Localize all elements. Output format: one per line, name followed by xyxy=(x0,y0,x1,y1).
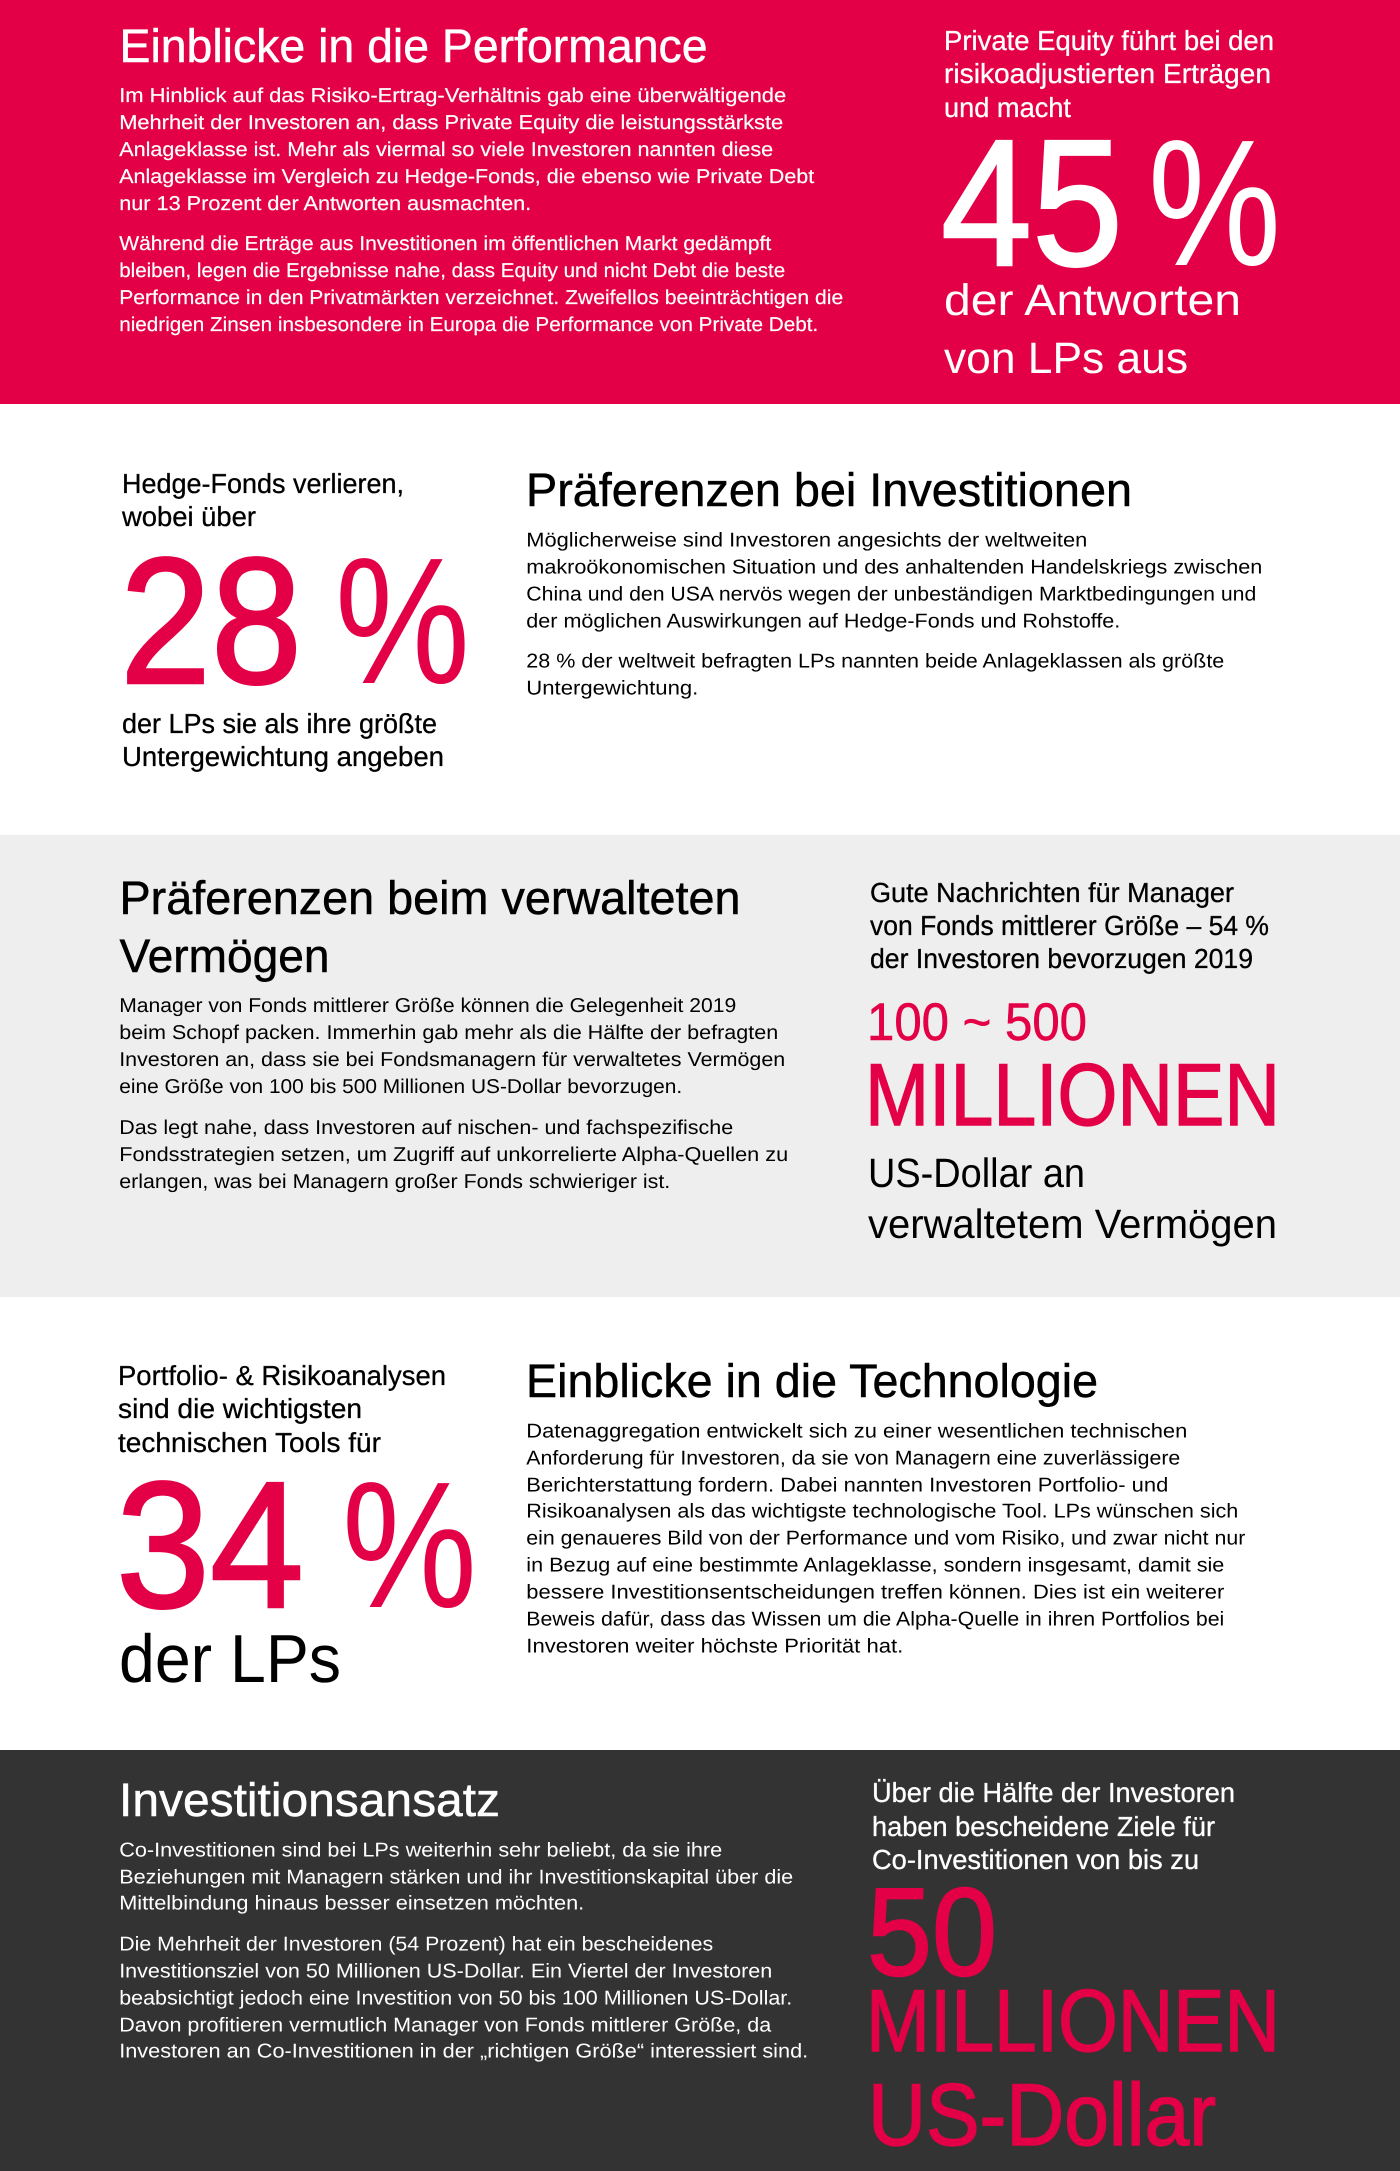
panel: Präferenzen beim verwalteten Vermögen xyxy=(0,835,1400,1297)
callout intro: Private Equity führt bei den xyxy=(944,25,1274,56)
text block: technology: Investoren weiter höchste Priorität hat. xyxy=(526,1636,903,1658)
big number: 50: 50 xyxy=(867,1863,997,2002)
callout outro xyxy=(868,1150,1277,1247)
heading: Präferenzen beim verwalteten Vermögen: Vermögen xyxy=(120,929,330,982)
text block: technology xyxy=(526,1421,1246,1658)
callout outro: verwaltetem Vermögen xyxy=(868,1201,1277,1247)
callout intro: haben bescheidene Ziele für xyxy=(872,1811,1215,1842)
text block: technology: ein genaueres Bild von der Performance und vom Risiko, und zwar nicht nur xyxy=(526,1528,1246,1550)
heading: Präferenzen beim verwalteten Vermögen xyxy=(120,871,740,982)
text block: performance paragraphs: Performance in den Privatmärkten verzeichnet. Zweifellos beeinträchtigen die xyxy=(119,287,843,309)
text block: technology: Beweis dafür, dass das Wissen um die Alpha-Quelle in ihren Portfolios bei xyxy=(526,1609,1224,1631)
callout intro: und macht xyxy=(944,92,1071,123)
panel: Einblicke in die Technologie xyxy=(116,1354,1246,1697)
callout intro xyxy=(944,25,1274,123)
callout: 100 ~ 500 Millionen xyxy=(865,877,1280,1247)
text block: assets under management: eine Größe von 100 bis 500 Millionen US-Dollar bevorzugen. xyxy=(119,1076,682,1098)
callout outro: der Antworten xyxy=(944,276,1241,325)
callout intro: der Investoren bevorzugen 2019 xyxy=(870,943,1253,974)
text block: investment approach: Beziehungen mit Managern stärken und ihr Investitionskapital über die xyxy=(119,1867,793,1889)
text block: assets under management: Fondsstrategien setzen, um Zugriff auf unkorrelierte Alpha-Quellen zu xyxy=(119,1144,788,1166)
callout intro: Hedge-Fonds verlieren, xyxy=(122,468,404,499)
text block: technology: Anforderung für Investoren, da sie von Managern eine zuverlässigere xyxy=(526,1448,1180,1470)
heading: Einblicke in die Performance: Einblicke in die Performance xyxy=(120,19,708,72)
text block: technology: Datenaggregation entwickelt sich zu einer wesentlichen technischen xyxy=(526,1421,1187,1443)
callout intro: Portfolio- & Risikoanalysen xyxy=(118,1360,446,1391)
text block: performance paragraphs: bleiben, legen die Ergebnisse nahe, dass Equity und nicht Debt die beste xyxy=(119,260,785,282)
big number: 45 % xyxy=(941,103,1281,304)
text block: investment preferences: makroökonomischen Situation und des anhaltenden Handelskriegs zwischen xyxy=(526,557,1262,579)
heading: Investitionsansatz: Investitionsansatz xyxy=(119,1773,500,1826)
text block: technology: Risikoanalysen als das wichtigste technologische Tool. LPs wünschen sich xyxy=(526,1501,1238,1523)
big number: 100 ~ 500: 100 ~ 500 xyxy=(867,993,1087,1052)
text block: investment preferences: Möglicherweise sind Investoren angesichts der weltweiten xyxy=(526,530,1087,552)
text block: technology: Berichterstattung fordern. Dabei nannten Investoren Portfolio- und xyxy=(526,1475,1168,1497)
callout intro: Co-Investitionen von bis zu xyxy=(872,1844,1199,1875)
text block: investment approach: beabsichtigt jedoch eine Investition von 50 bis 100 Millionen US-Dollar. xyxy=(119,1988,792,2010)
callout outro: der LPs sie als ihre größte xyxy=(122,708,437,739)
callout intro: wobei über xyxy=(121,501,256,532)
heading: Einblicke in die Technologie: Einblicke in die Technologie xyxy=(526,1354,1098,1407)
text block: assets under management: Manager von Fonds mittlerer Größe können die Gelegenheit 2019 xyxy=(119,995,736,1017)
callout outro: Untergewichtung angeben xyxy=(122,741,444,772)
panel: Investitionsansatz xyxy=(0,1750,1400,2171)
text block: investment approach: Co-Investitionen sind bei LPs weiterhin sehr beliebt, da sie ihre xyxy=(119,1840,722,1862)
callout: 28 % xyxy=(120,468,470,772)
text block: investment approach: Investoren an Co-Investitionen in der „richtigen Größe“ interessiert sind. xyxy=(119,2041,808,2063)
big number: 34 %: 34 xyxy=(116,1445,304,1646)
text block: assets under management: beim Schopf packen. Immerhin gab mehr als die Hälfte der befragten xyxy=(119,1022,778,1044)
big label: MILLIONEN: MILLIONEN xyxy=(865,1045,1280,1144)
callout intro xyxy=(872,1777,1235,1875)
callout intro: sind die wichtigsten xyxy=(118,1393,362,1424)
text block: investment preferences: China und den USA nervös wegen der unbeständigen Marktbedingungen und xyxy=(526,584,1256,606)
text block: assets under management: Das legt nahe, dass Investoren auf nischen- und fachspezifische xyxy=(119,1117,733,1139)
callout outro xyxy=(122,708,444,772)
big number: 34 % xyxy=(116,1445,477,1646)
text block: performance paragraphs xyxy=(119,85,843,336)
text block: investment preferences: der möglichen Auswirkungen auf Hedge-Fonds und Rohstoffe. xyxy=(526,611,1120,633)
callout intro xyxy=(118,1360,446,1458)
text block: performance paragraphs: Im Hinblick auf das Risiko-Ertrag-Verhältnis gab eine überwältigende xyxy=(119,85,786,107)
callout intro xyxy=(870,877,1269,974)
callout: 50 Millionen US-Dollar xyxy=(866,1777,1280,2164)
text block: performance paragraphs: Mehrheit der Investoren an, dass Private Equity die leistungsstärkste xyxy=(119,112,783,134)
text block: assets under management: erlangen, was bei Managern großer Fonds schwieriger ist. xyxy=(119,1171,670,1193)
big number: 45 %: % xyxy=(1148,103,1281,304)
callout outro: von LPs aus xyxy=(944,334,1188,383)
callout intro: Über die Hälfte der Investoren xyxy=(872,1777,1235,1808)
big number: 28 %: 28 xyxy=(120,521,302,722)
text block: performance paragraphs: Während die Erträge aus Investitionen im öffentlichen Markt gedämpft xyxy=(119,233,772,255)
callout intro: Gute Nachrichten für Manager xyxy=(870,877,1234,908)
heading: Präferenzen beim verwalteten Vermögen: Präferenzen beim verwalteten xyxy=(120,871,740,924)
callout outro xyxy=(944,276,1241,383)
callout: 34 % xyxy=(116,1360,477,1697)
callout outro: der LPs xyxy=(119,1621,341,1697)
text block: performance paragraphs: nur 13 Prozent der Antworten ausmachten. xyxy=(119,193,531,215)
callout intro xyxy=(121,468,404,532)
big number: 45 %: 45 xyxy=(941,103,1123,304)
text block: investment preferences: 28 % der weltweit befragten LPs nannten beide Anlageklassen als größte xyxy=(526,651,1224,673)
callout intro: von Fonds mittlerer Größe – 54 % xyxy=(870,910,1269,941)
panel: Einblicke in die Performance xyxy=(0,0,1400,404)
callout outro: US-Dollar an xyxy=(868,1150,1085,1196)
big number: 34 %: % xyxy=(342,1445,477,1646)
text block: assets under management: Investoren an, dass sie bei Fondsmanagern für verwaltetes Vermögen xyxy=(119,1049,785,1071)
text block: investment approach: Investitionsziel von 50 Millionen US-Dollar. Ein Viertel der Investoren xyxy=(119,1961,772,1983)
text block: performance paragraphs: Anlageklasse im Vergleich zu Hedge-Fonds, die ebenso wie Private Debt xyxy=(119,166,815,188)
text block: investment approach xyxy=(119,1840,808,2063)
big number: 28 %: % xyxy=(335,521,470,722)
big number: 28 % xyxy=(120,521,470,722)
callout: 45 % der Antworten von LPs xyxy=(941,25,1281,383)
callout intro: technischen Tools für xyxy=(118,1427,381,1458)
text block: technology: bessere Investitionsentscheidungen treffen können. Dies ist ein weiterer xyxy=(526,1582,1225,1604)
text block: investment approach: Die Mehrheit der Investoren (54 Prozent) hat ein bescheidenes xyxy=(119,1934,713,1956)
text block: performance paragraphs: niedrigen Zinsen insbesondere in Europa die Performance von Private Debt. xyxy=(119,314,818,336)
callout intro: risikoadjustierten Erträgen xyxy=(944,58,1271,89)
text block: assets under management xyxy=(119,995,788,1193)
big label: MILLIONEN: MILLIONEN xyxy=(866,1971,1280,2070)
text block: technology: in Bezug auf eine bestimmte Anlageklasse, sondern insgesamt, damit sie xyxy=(526,1555,1224,1577)
big label: US-Dollar: US-Dollar xyxy=(868,2065,1216,2164)
text block: investment approach: Davon profitieren vermutlich Manager von Fonds mittlerer Größe, da xyxy=(119,2015,772,2037)
panel: Präferenzen bei Investitionen xyxy=(120,463,1262,772)
text block: performance paragraphs: Anlageklasse ist. Mehr als viermal so viele Investoren nannten diese xyxy=(119,139,773,161)
text block: investment preferences xyxy=(526,530,1262,700)
text block: investment preferences: Untergewichtung. xyxy=(526,678,698,700)
text block: investment approach: Mittelbindung hinaus besser einsetzen möchten. xyxy=(119,1893,584,1915)
heading: Präferenzen bei Investitionen: Präferenzen bei Investitionen xyxy=(526,463,1132,516)
